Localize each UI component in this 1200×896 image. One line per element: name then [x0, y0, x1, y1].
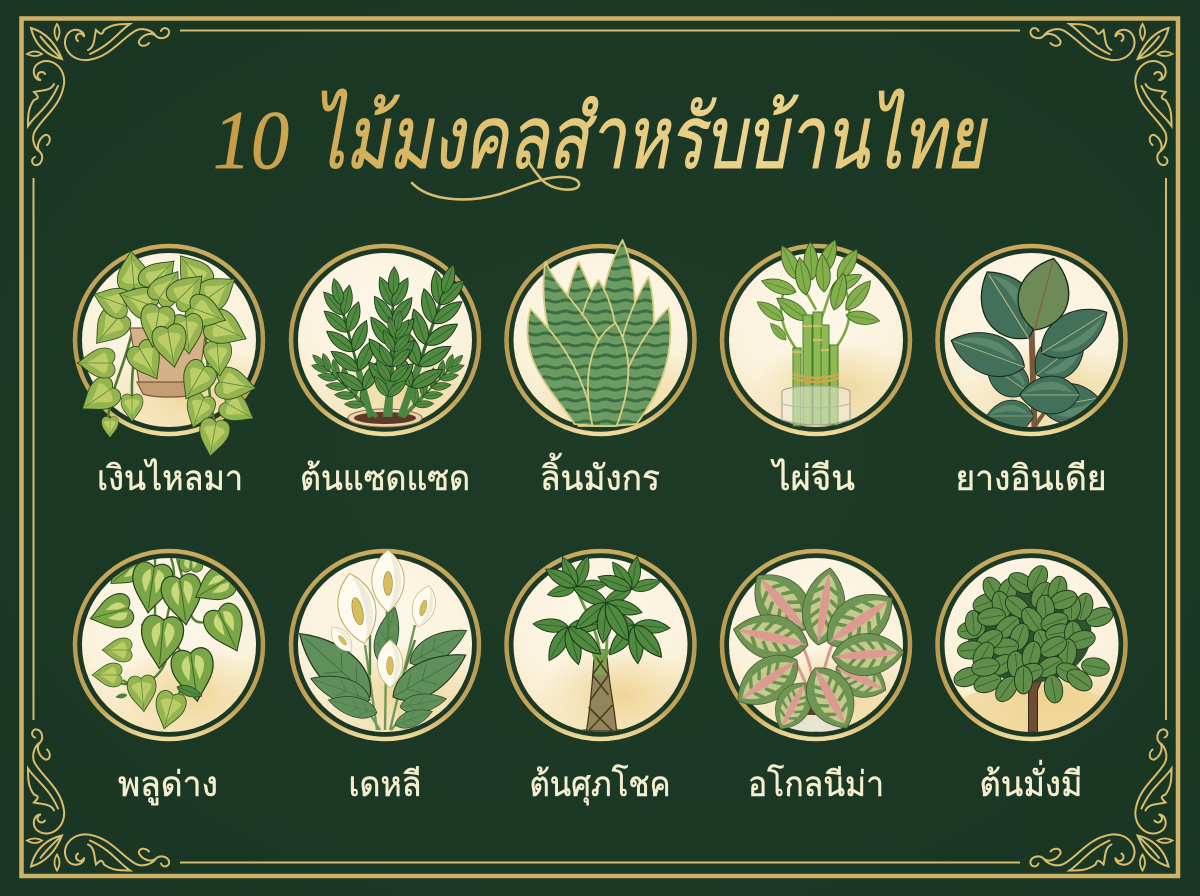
- title: ไม้มงคลสำหรับบ้านไทย: [312, 88, 988, 188]
- illustration: peace lily: [287, 550, 490, 745]
- label: อโกลนีม่า: [748, 764, 884, 804]
- illustration: snake plant: [506, 240, 706, 440]
- label: ต้นแซดแซด: [300, 459, 470, 498]
- title: [213, 88, 988, 199]
- plant card: ต้นแซดแซด: [291, 246, 490, 498]
- illustration: variegated pothos vine: [75, 542, 274, 745]
- plant card: อโกลนีม่า: [722, 551, 921, 804]
- illustration: round-crowned tree: [938, 551, 1136, 745]
- plant card: ลิ้นมังกร: [506, 240, 706, 498]
- illustration: ZZ plant: [291, 246, 490, 440]
- illustration: rubber plant: [938, 246, 1136, 440]
- label: เงินไหลมา: [97, 458, 243, 498]
- plant card: ยางอินเดีย: [938, 246, 1136, 498]
- illustration: aglaonema: [722, 551, 921, 745]
- title: 10: [213, 94, 289, 187]
- label: เดหลี: [348, 765, 422, 804]
- label: พลูด่าง: [118, 765, 218, 805]
- plant card: ต้นมั่งมี: [938, 551, 1136, 804]
- label: ต้นศุภโชค: [530, 764, 670, 805]
- plant card: ต้นศุภโชค: [506, 547, 706, 805]
- label: ไผ่จีน: [770, 458, 855, 498]
- plant card: พลูด่าง: [75, 542, 274, 805]
- plant card: เดหลี: [287, 550, 490, 804]
- label: ลิ้นมังกร: [540, 452, 660, 498]
- illustration: golden pothos in pot: [73, 246, 274, 459]
- illustration: lucky bamboo in glass: [722, 237, 921, 440]
- plant card: ไผ่จีน: [722, 237, 921, 498]
- label: ยางอินเดีย: [956, 459, 1106, 498]
- illustration: money tree: [506, 547, 706, 745]
- label: ต้นมั่งมี: [980, 760, 1082, 804]
- plant card: เงินไหลมา: [73, 246, 274, 498]
